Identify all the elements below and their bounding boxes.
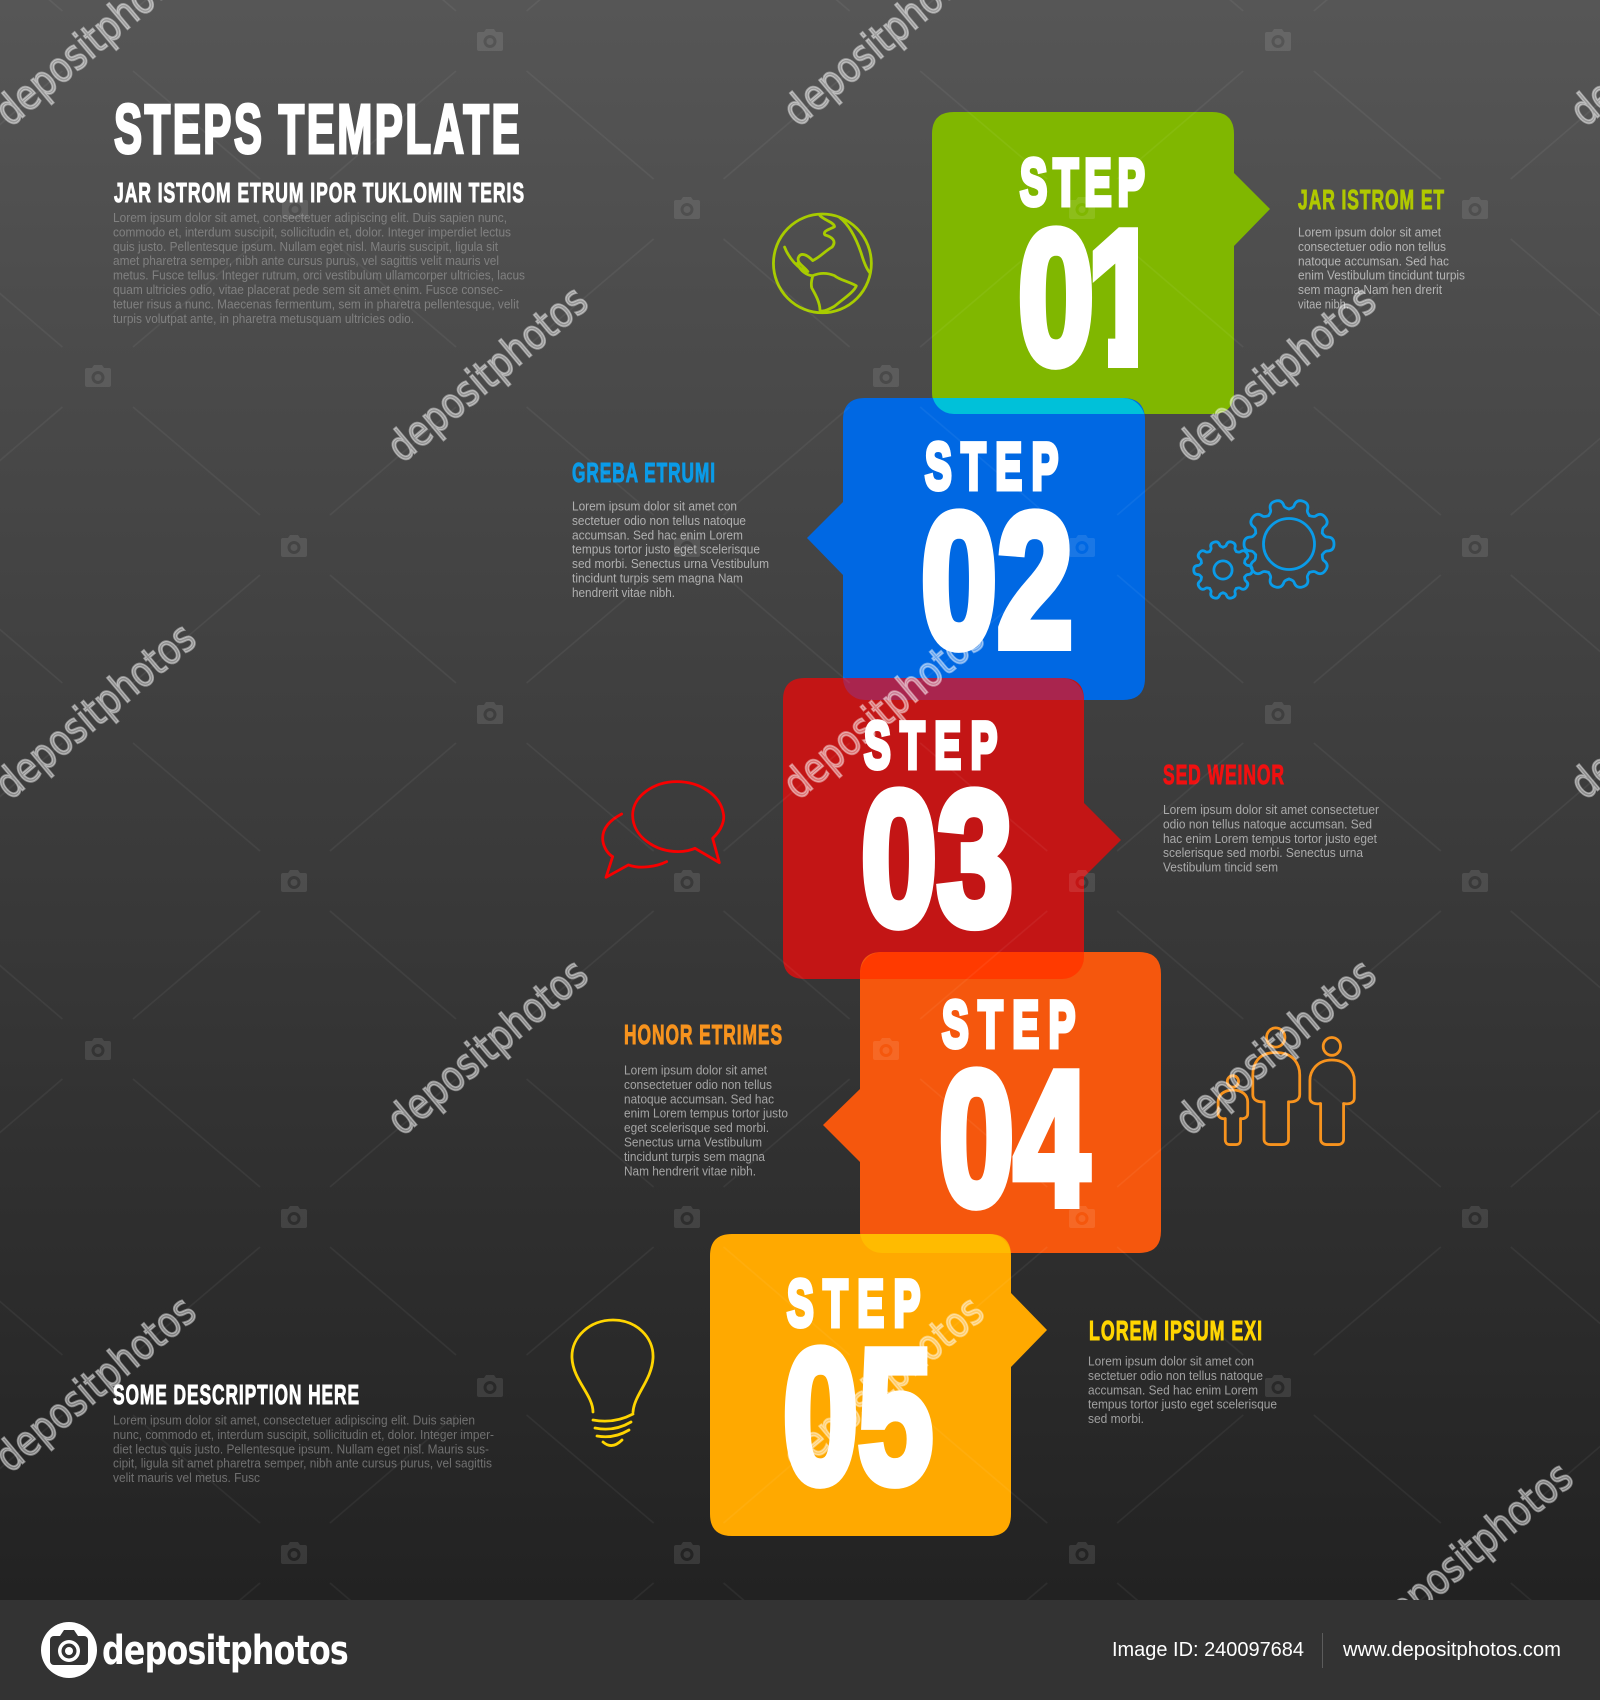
intro text block: amet pharetra semper, nibh ante cursus purus, vel sagittis velit mauris vel	[113, 254, 499, 268]
step 2 description: sectetuer odio non tellus natoque	[572, 514, 746, 528]
step 1 description: consectetuer odio non tellus	[1298, 240, 1446, 254]
step 3 label: 03	[861, 753, 1013, 965]
step 4 label	[939, 987, 1089, 1245]
step 2 label: STEP	[925, 429, 1068, 503]
footer bar	[0, 1600, 1600, 1700]
step 3 label	[861, 708, 1013, 965]
step 1 description: vitae nibh.	[1298, 298, 1349, 312]
step 5 label: 05	[783, 1311, 933, 1523]
title: STEPS TEMPLATE	[114, 90, 522, 168]
step 2 description: hendrerit vitae nibh.	[572, 586, 675, 600]
step 2 label: 02	[921, 475, 1073, 687]
step 1 label: STEP	[1020, 145, 1151, 219]
step 3 description: hac enim Lorem tempus tortor justo eget	[1163, 832, 1377, 846]
step 2 description: tempus tortor justo eget scelerisque	[572, 543, 760, 557]
step 5 label	[783, 1266, 933, 1523]
step 5 box with arrow	[710, 1234, 1047, 1536]
subtitle: JAR ISTROM ETRUM IPOR TUKLOMIN TERIS	[114, 177, 525, 208]
step 1 description	[1298, 184, 1465, 312]
step 5 description: Lorem ipsum dolor sit amet con	[1088, 1354, 1254, 1368]
step 1 description: natoque accumsan. Sed hac	[1298, 254, 1449, 268]
intro text block: turpis volutpat ante, in pharetra metusquam ultricies odio.	[113, 312, 414, 326]
footer logo: depositphotos	[102, 1628, 348, 1674]
step 5 description: LOREM IPSUM EXI	[1089, 1315, 1263, 1346]
image id: Image ID: 240097684	[1112, 1639, 1304, 1661]
step 2 box with arrow	[807, 398, 1145, 700]
step 1 label	[1019, 156, 1145, 370]
step 5 description: sed morbi.	[1088, 1412, 1144, 1426]
step 5 description: tempus tortor justo eget scelerisque	[1088, 1398, 1277, 1412]
bottom description: cipit, ligula sit amet pharetra semper, nibh ante cursus purus, vel sagittis	[113, 1457, 492, 1471]
step 2 description: tincidunt turpis sem magna Nam	[572, 572, 743, 586]
icon: globe	[773, 214, 871, 313]
step 3 label: STEP	[864, 708, 1007, 782]
step 2 description: sed morbi. Senectus urna Vestibulum	[572, 557, 769, 571]
watermark layer: depositphotos	[1165, 276, 1385, 471]
step 1 box with arrow	[932, 112, 1270, 414]
step 5 description: sectetuer odio non tellus natoque	[1088, 1369, 1263, 1383]
step 2 description: Lorem ipsum dolor sit amet con	[572, 500, 737, 514]
watermark layer: depositphotos	[377, 949, 597, 1144]
intro text block	[113, 211, 525, 326]
bottom description: nunc, commodo et, interdum suscipit, sollicitudin et, dolor. Integer imper-	[113, 1428, 494, 1442]
icon: people	[1218, 1028, 1354, 1145]
step 4 label: STEP	[942, 987, 1085, 1061]
intro text block: Lorem ipsum dolor sit amet, consectetuer adipiscing elit. Duis sapien nunc,	[113, 211, 507, 225]
icon: light bulb	[572, 1320, 653, 1446]
step 4 description: Nam hendrerit vitae nibh.	[624, 1164, 756, 1178]
bottom description: velit mauris vel metus. Fusc	[113, 1471, 260, 1485]
step 3 description: Vestibulum tincid sem	[1163, 861, 1278, 875]
step 3 description	[1163, 759, 1379, 875]
step 2 description: accumsan. Sed hac enim Lorem	[572, 528, 743, 542]
intro text block: metus. Fusce tellus. Integer rutrum, orci vestibulum ullamcorper ultricies, lacus	[113, 269, 525, 283]
watermark layer: depositphotos	[773, 1286, 993, 1481]
icon: speech bubbles	[603, 782, 724, 877]
step 4 description: eget scelerisque sed morbi.	[624, 1121, 769, 1135]
intro text block: commodo et, interdum suscipit, sollicitudin et, dolor. Integer imperdiet lectus	[113, 225, 511, 239]
icon: gears	[1194, 498, 1334, 600]
step 3 description: Lorem ipsum dolor sit amet consectetuer	[1163, 803, 1379, 817]
step 2 label	[921, 429, 1073, 687]
step 4 description: natoque accumsan. Sed hac	[624, 1092, 774, 1106]
step 1 description: Lorem ipsum dolor sit amet	[1298, 226, 1441, 240]
step 4 description: HONOR ETRIMES	[624, 1019, 783, 1050]
step 4 description: Lorem ipsum dolor sit amet	[624, 1064, 767, 1078]
watermark layer: depositphotos	[1165, 949, 1385, 1144]
step 1 description: sem magna Nam hen drerit	[1298, 283, 1443, 297]
watermark layer: depositphotos	[377, 276, 597, 471]
footer logo	[41, 1622, 348, 1678]
step 2 description	[572, 457, 769, 600]
step 3 description: scelerisque sed morbi. Senectus urna	[1163, 846, 1363, 860]
step 3 description: odio non tellus natoque accumsan. Sed	[1163, 817, 1372, 831]
watermark layer: depositphotos	[773, 613, 993, 808]
intro text block: tetuer risus a nunc. Maecenas fermentum, sem in pharetra pellentesque, velit	[113, 297, 519, 311]
step 2 description: GREBA ETRUMI	[572, 457, 716, 488]
step 4 label: 04	[939, 1033, 1089, 1245]
step 5 description	[1088, 1315, 1277, 1426]
intro text block: quam ultricies odio, vitae placerat pede sem sit amet enim. Fusce consec-	[113, 283, 503, 297]
step 3 description: SED WEINOR	[1163, 759, 1285, 790]
website: www.depositphotos.com	[1342, 1639, 1561, 1661]
bottom description: SOME DESCRIPTION HERE	[113, 1379, 360, 1410]
step 1 label: 01	[1018, 192, 1160, 404]
step 4 description: consectetuer odio non tellus	[624, 1078, 772, 1092]
step 4 description: enim Lorem tempus tortor justo	[624, 1107, 788, 1121]
step 4 description: Senectus urna Vestibulum	[624, 1136, 762, 1150]
step 5 description: accumsan. Sed hac enim Lorem	[1088, 1383, 1258, 1397]
step 4 description: tincidunt turpis sem magna	[624, 1150, 765, 1164]
step 4 description	[624, 1019, 788, 1178]
bottom description	[113, 1379, 494, 1485]
step 4 box with arrow	[823, 952, 1161, 1253]
bottom description: Lorem ipsum dolor sit amet, consectetuer adipiscing elit. Duis sapien	[113, 1414, 475, 1428]
step 3 box with arrow	[783, 678, 1121, 979]
bottom description: diet lectus quis justo. Pellentesque ipsum. Nullam eget nisl. Mauris sus-	[113, 1442, 489, 1456]
step 1 description: enim Vestibulum tincidunt turpis	[1298, 269, 1465, 283]
step 5 label: STEP	[787, 1266, 930, 1340]
intro text block: quis justo. Pellentesque ipsum. Nullam eget nisl. Mauris suscipit, ligula sit	[113, 240, 498, 254]
step 1 description: JAR ISTROM ET	[1298, 184, 1445, 215]
overlaps between step boxes	[710, 398, 1161, 1536]
